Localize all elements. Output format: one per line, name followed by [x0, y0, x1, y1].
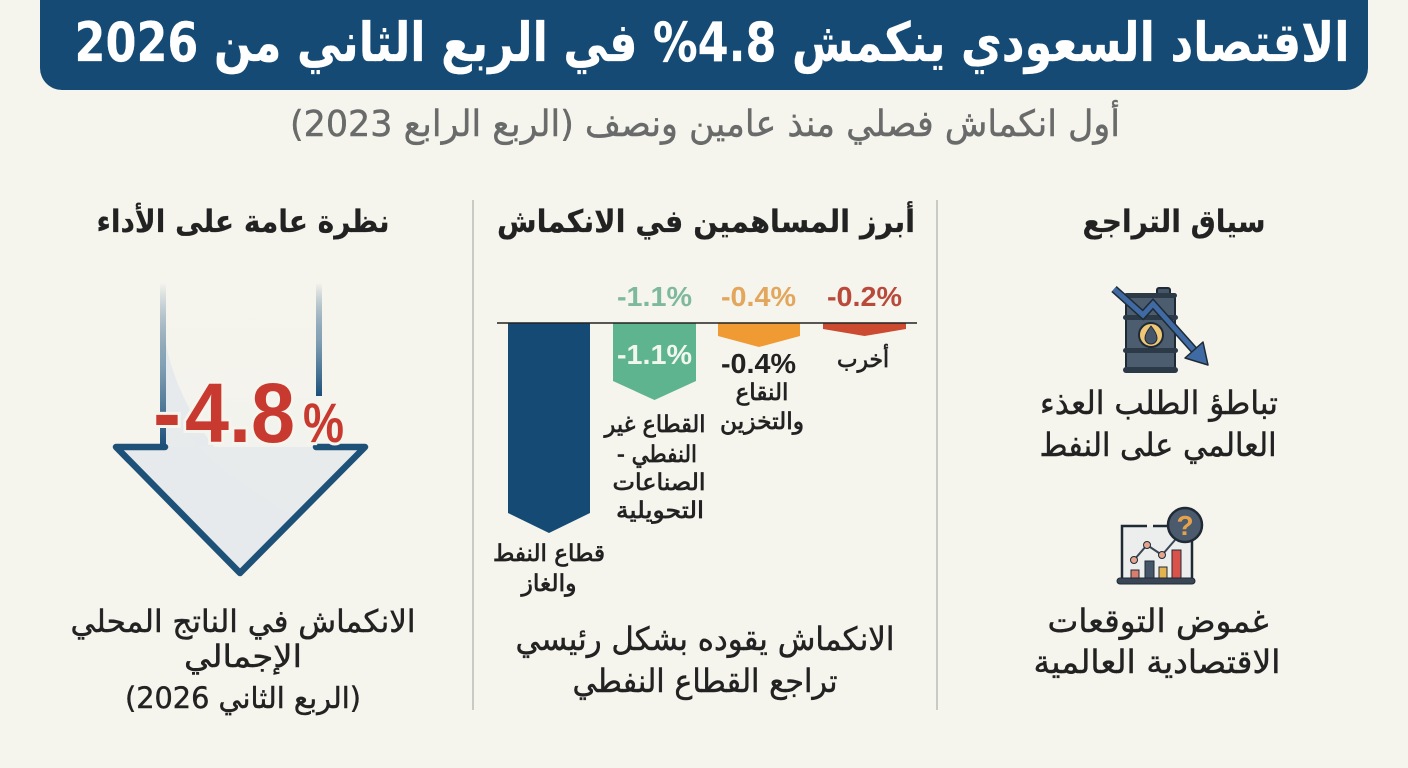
- icon: chart with question mark: ?: [1176, 510, 1194, 541]
- text: economic uncertainty: الاقتصادية العالمية: [1034, 643, 1280, 681]
- text: economic uncertainty: [1034, 602, 1280, 681]
- value labels above bars: -0.4%: [721, 281, 796, 312]
- bar: refining and storage: النقاع: [736, 380, 788, 406]
- bar: other: [823, 323, 906, 373]
- bar: refining and storage: والتخزين: [720, 409, 804, 435]
- value: -4.8%: 4.8: [185, 366, 295, 460]
- value: -4.8%: [153, 366, 344, 460]
- caption: GDP contraction: الإجمالي: [184, 639, 302, 675]
- heading: main contributors: أبرز المساهمين في الانكماش: [497, 201, 915, 240]
- text: oil demand: تباطؤ الطلب العذء: [1040, 384, 1278, 422]
- icon: oil barrel with falling arrow: [1114, 288, 1208, 373]
- icon: down arrow: [115, 283, 366, 574]
- chart axis: [497, 322, 917, 324]
- heading: decline context: سياق التراجع: [1082, 204, 1266, 240]
- bar: refining and storage: -0.4%: [721, 348, 796, 379]
- text: oil demand: [1040, 384, 1278, 464]
- bar: non-oil sector: التحويلية: [616, 498, 704, 524]
- title banner: [40, 0, 1368, 90]
- bar: other: أخرب: [837, 344, 889, 373]
- chart caption: الانكماش يقوده بشكل رئيسي: [516, 620, 894, 658]
- bar: non-oil sector: الصناعات: [612, 470, 706, 496]
- bar chart: [493, 281, 917, 597]
- panel: decline context: [1034, 204, 1280, 681]
- bar: oil and gas: قطاع النفط: [493, 541, 605, 567]
- column dividers: [473, 200, 937, 710]
- value labels above bars: -0.2%: [827, 281, 902, 312]
- value labels above bars: -1.1%: [617, 281, 692, 312]
- caption: GDP contraction: (الربع الثاني 2026): [125, 681, 361, 716]
- caption: GDP contraction: [70, 604, 416, 716]
- panel: main contributors: [493, 201, 917, 700]
- value: -4.8%: %: [303, 391, 344, 454]
- panel: performance overview: [70, 202, 416, 716]
- bar: non-oil sector: [604, 323, 706, 524]
- bar: refining and storage: [718, 323, 804, 435]
- chart caption: تراجع القطاع النفطي: [572, 662, 838, 700]
- text: oil demand: العالمي على النفط: [1040, 426, 1276, 464]
- bar: oil and gas: [493, 323, 605, 597]
- value: -4.8%: -: [153, 366, 181, 460]
- heading: performance overview: نظرة عامة على الأداء: [96, 202, 390, 240]
- chart caption: [516, 620, 894, 700]
- bar: oil and gas: والغاز: [520, 571, 576, 597]
- subtitle: أول انكماش فصلي منذ عامين ونصف (الربع الرابع 2023): [290, 100, 1120, 145]
- bar: non-oil sector: القطاع غير: [604, 412, 706, 438]
- caption: GDP contraction: الانكماش في الناتج المحلي: [70, 604, 416, 640]
- text: economic uncertainty: غموض التوقعات: [1048, 602, 1268, 640]
- icon: chart with question mark: [1117, 508, 1202, 584]
- bar: non-oil sector: -1.1%: [617, 339, 692, 370]
- value labels above bars: [617, 281, 902, 312]
- bar: non-oil sector: النفطي -: [617, 442, 697, 468]
